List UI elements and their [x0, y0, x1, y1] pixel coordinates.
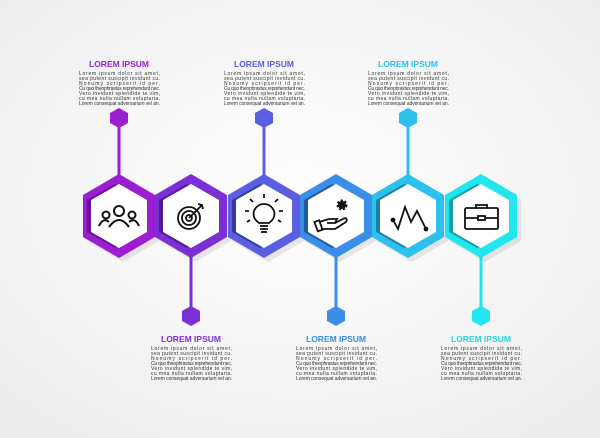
text block 4 (bottom): LOREM IPSUM — [306, 334, 366, 344]
text block 2 (bottom): Nonumy scripserit id per. — [151, 356, 232, 362]
text block 6 (bottom): Cu quo theophrastus reprehendunt nec. — [441, 361, 522, 367]
text block 6 (bottom) — [441, 334, 522, 382]
text block 1 (top): sea putent suscipit invidunt cu. — [79, 76, 160, 82]
text block 2 (bottom): cu mea nulla nullam voluptaria. — [151, 371, 232, 377]
text block 6 (bottom): Nonumy scripserit id per. — [441, 356, 522, 362]
text block 6 (bottom): sea putent suscipit invidunt cu. — [441, 351, 522, 357]
text block 1 (top) — [79, 59, 160, 107]
text block 5 (top): Lorem consequat adversarium vel an. — [368, 101, 449, 107]
hex 2 — [155, 174, 227, 258]
text block 3 (top): Vero invidunt splendide te vim, — [224, 91, 305, 97]
text block 1 (top): Vero invidunt splendide te vim, — [79, 91, 160, 97]
text block 5 (top): sea putent suscipit invidunt cu. — [368, 76, 449, 82]
text block 3 (top): Lorem ipsum dolor sit amet, — [224, 71, 305, 77]
text block 3 (top): Cu quo theophrastus reprehendunt nec. — [224, 86, 305, 92]
hex 3 — [228, 174, 300, 258]
text block 2 (bottom): Vero invidunt splendide te vim, — [151, 366, 232, 372]
hex 1 — [83, 174, 155, 258]
icon: hand with gear — [314, 201, 347, 231]
text block 3 (top) — [224, 59, 305, 107]
hex 4 — [300, 174, 372, 258]
text block 6 (bottom): Lorem consequat adversarium vel an. — [441, 376, 522, 382]
text block 5 (top): LOREM IPSUM — [378, 59, 438, 69]
text block 2 (bottom): sea putent suscipit invidunt cu. — [151, 351, 232, 357]
connector lines — [119, 118, 481, 316]
text block 5 (top): Lorem ipsum dolor sit amet, — [368, 71, 449, 77]
text block 3 (top): sea putent suscipit invidunt cu. — [224, 76, 305, 82]
hex 5 — [372, 174, 444, 258]
text block 2 (bottom): Cu quo theophrastus reprehendunt nec. — [151, 361, 232, 367]
text block 2 (bottom): Lorem ipsum dolor sit amet, — [151, 346, 232, 352]
text block 5 (top): cu mea nulla nullam voluptaria. — [368, 96, 449, 102]
text block 1 (top): Cu quo theophrastus reprehendunt nec. — [79, 86, 160, 92]
text block 2 (bottom): LOREM IPSUM — [161, 334, 221, 344]
text block 3 (top): LOREM IPSUM — [234, 59, 294, 69]
text block 4 (bottom) — [296, 334, 377, 382]
text block 5 (top): Nonumy scripserit id per. — [368, 81, 449, 87]
text block 2 (bottom) — [151, 334, 232, 382]
text block 6 (bottom): Vero invidunt splendide te vim, — [441, 366, 522, 372]
text block 6 (bottom): cu mea nulla nullam voluptaria. — [441, 371, 522, 377]
text block 3 (top): cu mea nulla nullam voluptaria. — [224, 96, 305, 102]
icon: lightbulb — [245, 194, 283, 232]
text block 3 (top): Nonumy scripserit id per. — [224, 81, 305, 87]
text block 4 (bottom): Vero invidunt splendide te vim, — [296, 366, 377, 372]
hexagon chain — [83, 174, 521, 262]
text block 1 (top): cu mea nulla nullam voluptaria. — [79, 96, 160, 102]
hex 6 — [445, 174, 517, 258]
text block 5 (top): Cu quo theophrastus reprehendunt nec. — [368, 86, 449, 92]
text block 5 (top): Vero invidunt splendide te vim, — [368, 91, 449, 97]
text block 4 (bottom): Lorem ipsum dolor sit amet, — [296, 346, 377, 352]
text block 3 (top): Lorem consequat adversarium vel an. — [224, 101, 305, 107]
small hex markers — [110, 108, 490, 326]
text block 1 (top): Nonumy scripserit id per. — [79, 81, 160, 87]
text block 4 (bottom): sea putent suscipit invidunt cu. — [296, 351, 377, 357]
text block 5 (top) — [368, 59, 449, 107]
text block 1 (top): LOREM IPSUM — [89, 59, 149, 69]
text block 4 (bottom): Cu quo theophrastus reprehendunt nec. — [296, 361, 377, 367]
icon: people — [99, 206, 139, 227]
text block 4 (bottom): Nonumy scripserit id per. — [296, 356, 377, 362]
text block 4 (bottom): cu mea nulla nullam voluptaria. — [296, 371, 377, 377]
text block 6 (bottom): Lorem ipsum dolor sit amet, — [441, 346, 522, 352]
text block 2 (bottom): Lorem consequat adversarium vel an. — [151, 376, 232, 382]
text block 1 (top): Lorem consequat adversarium vel an. — [79, 101, 160, 107]
icon: briefcase — [465, 205, 498, 229]
text block 1 (top): Lorem ipsum dolor sit amet, — [79, 71, 160, 77]
text block 6 (bottom): LOREM IPSUM — [451, 334, 511, 344]
icon: zigzag chart — [392, 207, 428, 230]
text block 4 (bottom): Lorem consequat adversarium vel an. — [296, 376, 377, 382]
icon: target — [178, 204, 203, 229]
